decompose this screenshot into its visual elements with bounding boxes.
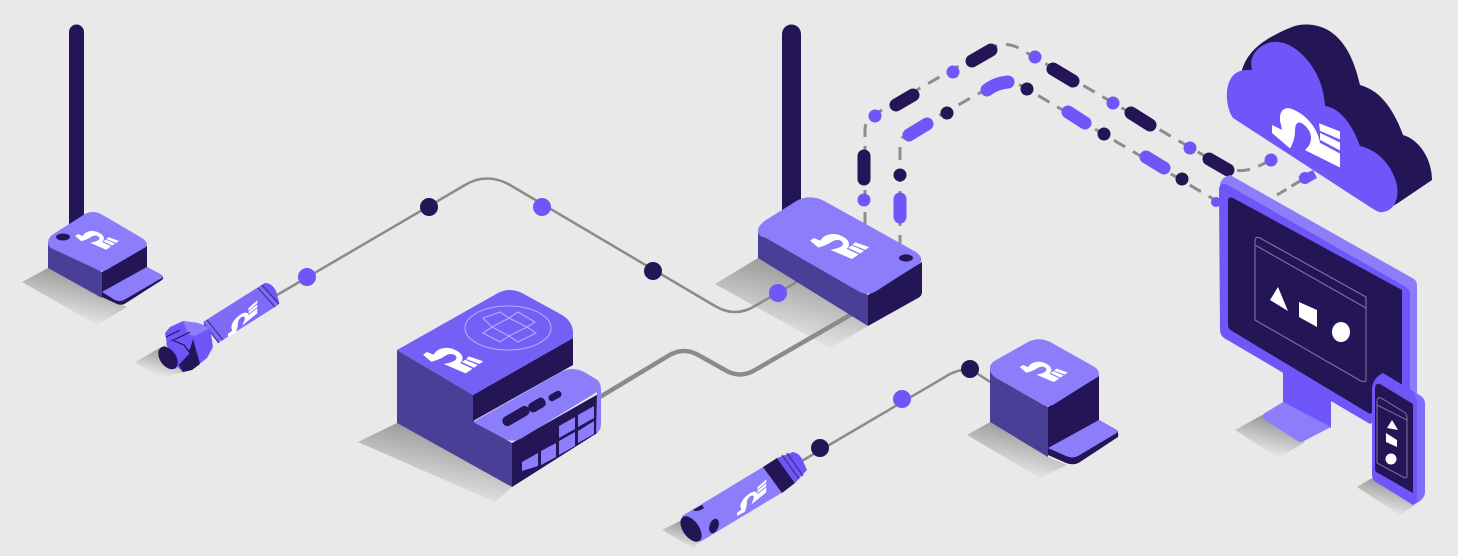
window wireframe — [1255, 237, 1366, 382]
cloud connector — [1298, 170, 1317, 183]
wire: sensor to box — [795, 369, 995, 465]
logo — [737, 479, 766, 518]
logo — [421, 341, 483, 377]
wire: controller to gateway — [600, 314, 852, 397]
shapes — [1270, 287, 1350, 342]
logo — [1018, 356, 1068, 385]
wire nodes — [298, 198, 979, 457]
logo — [228, 300, 257, 339]
device: small box — [990, 339, 1118, 464]
phone — [1372, 373, 1425, 505]
monitor — [1219, 175, 1417, 442]
cloud — [1227, 25, 1432, 212]
sensor: proximity sensor left — [154, 283, 279, 373]
device: small gateway with antenna — [48, 25, 163, 305]
stand — [1283, 370, 1331, 428]
screen — [1228, 197, 1402, 414]
device: controller unit — [397, 290, 601, 487]
device: central gateway — [758, 24, 922, 326]
node on wire near gateway — [769, 284, 787, 302]
sensor: cylindrical sensor bottom — [676, 452, 807, 545]
hex nut — [165, 321, 213, 372]
logo — [73, 226, 119, 252]
antenna — [782, 24, 801, 210]
wire: sensor to gateway — [277, 178, 800, 312]
wireless link: outer dashed — [858, 44, 1278, 225]
antenna — [69, 25, 84, 226]
logo — [1272, 92, 1340, 177]
cloud front — [1227, 42, 1397, 212]
logo — [808, 227, 869, 262]
shadows — [22, 258, 1415, 548]
wireless link: inner dashed — [894, 82, 1305, 248]
cooling pattern — [465, 306, 551, 350]
windows — [522, 406, 594, 471]
slots — [501, 389, 563, 428]
